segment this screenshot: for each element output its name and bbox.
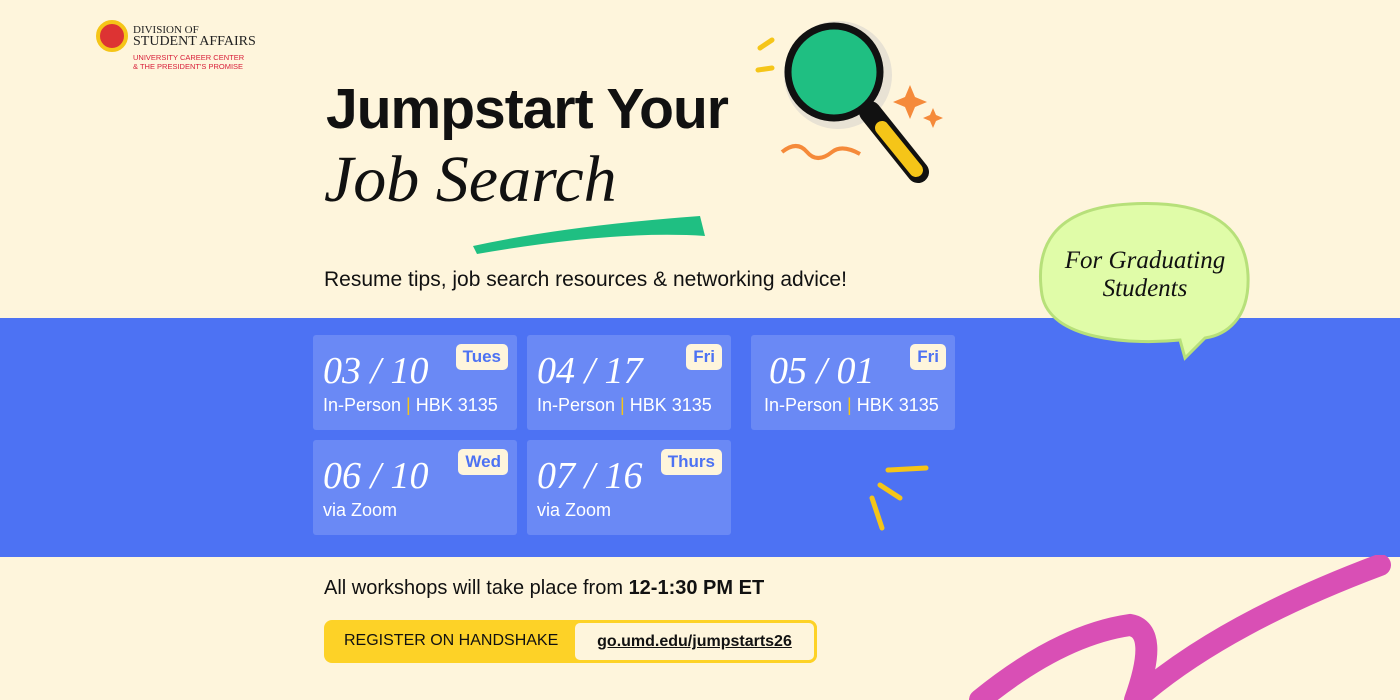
pink brush stroke bbox=[969, 555, 1391, 700]
card 03/10: 03 / 10 bbox=[323, 350, 429, 392]
logo subtext bbox=[133, 53, 244, 71]
card 05/01: In-Person | HBK 3135 bbox=[764, 395, 939, 415]
logo text bbox=[133, 24, 256, 49]
card 06/10: via Zoom bbox=[323, 500, 397, 520]
icon: magnifying glass bbox=[756, 21, 943, 183]
card 06/10 bbox=[313, 440, 517, 535]
card 07/16: Thurs bbox=[668, 452, 715, 471]
card 03/10: Tues bbox=[463, 347, 501, 366]
logo bbox=[96, 20, 256, 71]
button label: REGISTER ON HANDSHAKE bbox=[344, 632, 558, 649]
card 04/17 bbox=[527, 335, 731, 430]
title script: Job Search bbox=[324, 143, 617, 216]
link box: go.umd.edu/jumpstarts26 bbox=[597, 633, 792, 650]
link box bbox=[572, 620, 817, 663]
logo subtext: & THE PRESIDENT'S PROMISE bbox=[133, 62, 243, 71]
title: Jumpstart Your bbox=[326, 77, 728, 141]
card 04/17: In-Person | HBK 3135 bbox=[537, 395, 712, 415]
card 05/01: 05 / 01 bbox=[769, 350, 875, 392]
card 06/10: 06 / 10 bbox=[323, 455, 429, 497]
card 05/01: Fri bbox=[917, 347, 939, 366]
card 03/10: In-Person | HBK 3135 bbox=[323, 395, 498, 415]
logo text: DIVISION OF bbox=[133, 24, 199, 36]
blue band bbox=[0, 318, 1400, 557]
card 07/16: via Zoom bbox=[537, 500, 611, 520]
icon: yellow spark lines bbox=[870, 466, 928, 530]
icon: seal bbox=[96, 20, 128, 52]
speech bubble bbox=[1039, 202, 1250, 361]
speech bubble: For Graduating bbox=[1064, 247, 1225, 274]
card 05/01 bbox=[751, 335, 955, 430]
speech bubble: Students bbox=[1103, 275, 1187, 302]
register button bbox=[324, 620, 817, 663]
card 03/10 bbox=[313, 335, 517, 430]
subtitle: Resume tips, job search resources & networking advice! bbox=[324, 268, 847, 291]
card 06/10: Wed bbox=[465, 452, 501, 471]
card 04/17: Fri bbox=[693, 347, 715, 366]
logo subtext: UNIVERSITY CAREER CENTER bbox=[133, 53, 244, 62]
logo text: STUDENT AFFAIRS bbox=[133, 34, 256, 49]
card 04/17: 04 / 17 bbox=[537, 350, 643, 392]
card 07/16: 07 / 16 bbox=[537, 455, 643, 497]
card 07/16 bbox=[527, 440, 731, 535]
workshop time text: All workshops will take place from 12-1:30 PM ET bbox=[324, 577, 764, 599]
green underline stroke bbox=[473, 216, 705, 254]
